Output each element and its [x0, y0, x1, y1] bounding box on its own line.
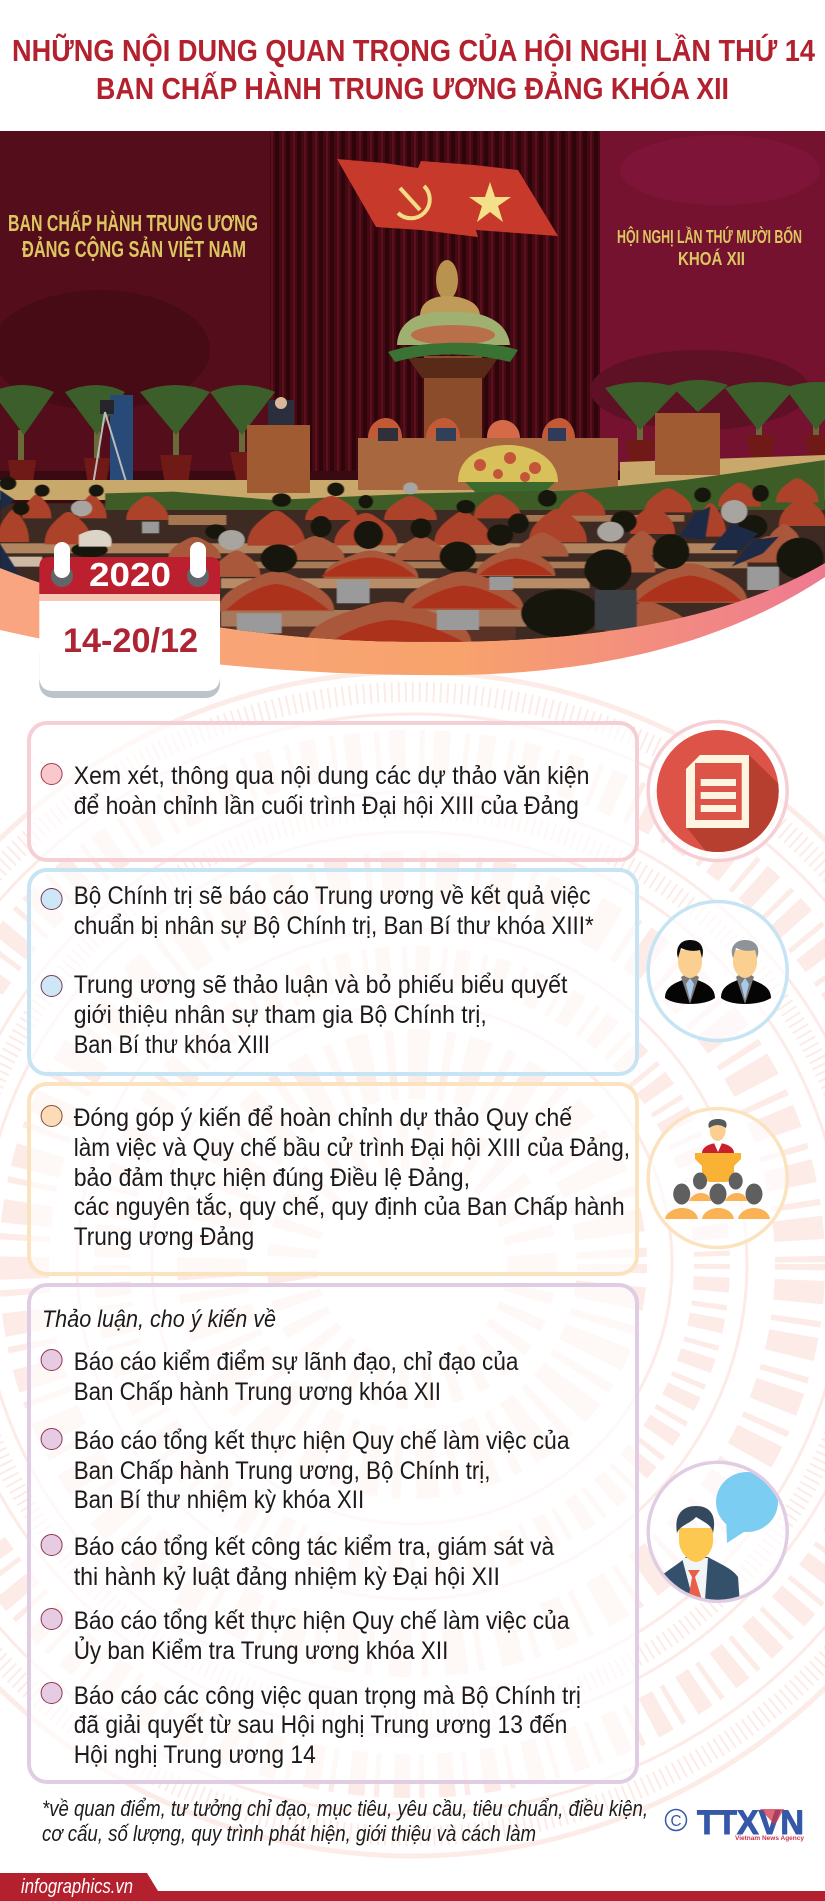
report list text	[74, 1348, 581, 1769]
panel: review of draft documents: để hoàn chỉnh lần cuối trình Đại hội XIII của Đảng	[74, 792, 579, 820]
icon: speaker and audience	[648, 1108, 787, 1248]
logo: TTXVN Vietnam News Agency: TTXVN	[697, 1804, 804, 1842]
stage banners: KHOÁ XII	[678, 248, 745, 269]
footer bar	[0, 1873, 825, 1901]
conference hall photo	[0, 131, 825, 653]
panel: working regulations: làm việc và Quy chế bầu cử trình Đại hội XIII của Đảng,	[74, 1134, 630, 1162]
panel: personnel preparation: giới thiệu nhân sự tham gia Bộ Chính trị,	[74, 1001, 487, 1029]
footnote	[42, 1796, 648, 1846]
discussion heading: Thảo luận, cho ý kiến về	[42, 1306, 276, 1333]
panel: personnel preparation: Bộ Chính trị sẽ báo cáo Trung ương về kết quả việc	[74, 882, 590, 910]
report list text: Báo cáo tổng kết thực hiện Quy chế làm việc của	[74, 1427, 570, 1455]
report list text: đã giải quyết từ sau Hội nghị Trung ương 13 đến	[74, 1711, 567, 1739]
report list text: Báo cáo kiểm điểm sự lãnh đạo, chỉ đạo của	[74, 1348, 518, 1376]
report list text: Báo cáo tổng kết công tác kiểm tra, giám sát và	[74, 1533, 554, 1561]
camera operator	[93, 395, 133, 485]
panel: review of draft documents: Xem xét, thông qua nội dung các dự thảo văn kiện	[74, 762, 589, 790]
icon: man with speech bubble	[648, 1462, 787, 1605]
footer bar: infographics.vn	[21, 1876, 133, 1898]
panel: personnel preparation	[29, 870, 637, 1074]
panel: working regulations	[29, 1084, 637, 1274]
report list text: Báo cáo tổng kết thực hiện Quy chế làm việc của	[74, 1607, 570, 1635]
bust and pedestal	[388, 260, 518, 446]
stage banners: ĐẢNG CỘNG SẢN VIỆT NAM	[22, 234, 246, 262]
potted plants	[0, 380, 825, 490]
calendar badge: 2020, 14-20/12: 2020	[89, 556, 171, 593]
report bullets	[41, 1350, 62, 1704]
icon: two officials	[648, 902, 787, 1040]
report list text: Ban Chấp hành Trung ương khóa XII	[74, 1378, 441, 1406]
title: BAN CHẤP HÀNH TRUNG ƯƠNG ĐẢNG KHÓA XII	[96, 70, 729, 106]
footnote: cơ cấu, số lượng, quy trình phát hiện, giới thiệu và cách làm	[42, 1821, 536, 1846]
panel: personnel preparation: Ban Bí thư khóa XIII	[74, 1031, 270, 1059]
footnote: *về quan điểm, tư tưởng chỉ đạo, mục tiêu, yêu cầu, tiêu chuẩn, điều kiện,	[42, 1796, 648, 1821]
panel: working regulations: các nguyên tắc, quy chế, quy định của Ban Chấp hành	[74, 1192, 625, 1221]
title	[12, 32, 816, 106]
stage with table and podiums	[0, 397, 825, 502]
stage banners: BAN CHẤP HÀNH TRUNG ƯƠNG	[8, 209, 258, 236]
panel: review of draft documents	[29, 723, 637, 860]
orange curved band	[0, 555, 825, 675]
panel: personnel preparation: chuẩn bị nhân sự Bộ Chính trị, Ban Bí thư khóa XIII*	[74, 912, 594, 940]
panel: working regulations: Trung ương Đảng	[74, 1223, 254, 1251]
panel: working regulations: Đóng góp ý kiến để hoàn chỉnh dự thảo Quy chế	[74, 1104, 572, 1132]
flag	[337, 159, 558, 237]
logo: TTXVN Vietnam News Agency: Vietnam News Agency	[735, 1835, 804, 1842]
panel: personnel preparation: Trung ương sẽ thảo luận và bỏ phiếu biểu quyết	[74, 971, 567, 999]
report list text: Hội nghị Trung ương 14	[74, 1741, 316, 1769]
report list text: thi hành kỷ luật đảng nhiệm kỳ Đại hội XII	[74, 1563, 500, 1591]
report list text: Báo cáo các công việc quan trọng mà Bộ Chính trị	[74, 1682, 581, 1710]
logo: TTXVN Vietnam News Agency: C	[670, 1813, 682, 1830]
report list text: Ban Chấp hành Trung ương, Bộ Chính trị,	[74, 1457, 490, 1485]
report list text: Ủy ban Kiểm tra Trung ương khóa XII	[74, 1635, 448, 1665]
calendar badge: 2020, 14-20/12	[39, 542, 220, 698]
calendar badge: 2020, 14-20/12: 14-20/12	[63, 622, 198, 660]
seated delegates audience	[0, 460, 825, 653]
icon: document	[648, 722, 790, 860]
report list text: Ban Bí thư nhiệm kỳ khóa XII	[74, 1486, 364, 1514]
stage banners	[8, 209, 802, 269]
panel: discussion reports	[29, 1285, 637, 1782]
background watermark: drum pattern	[0, 672, 825, 1856]
panel: working regulations: bảo đảm thực hiện đúng Điều lệ Đảng,	[74, 1164, 470, 1192]
